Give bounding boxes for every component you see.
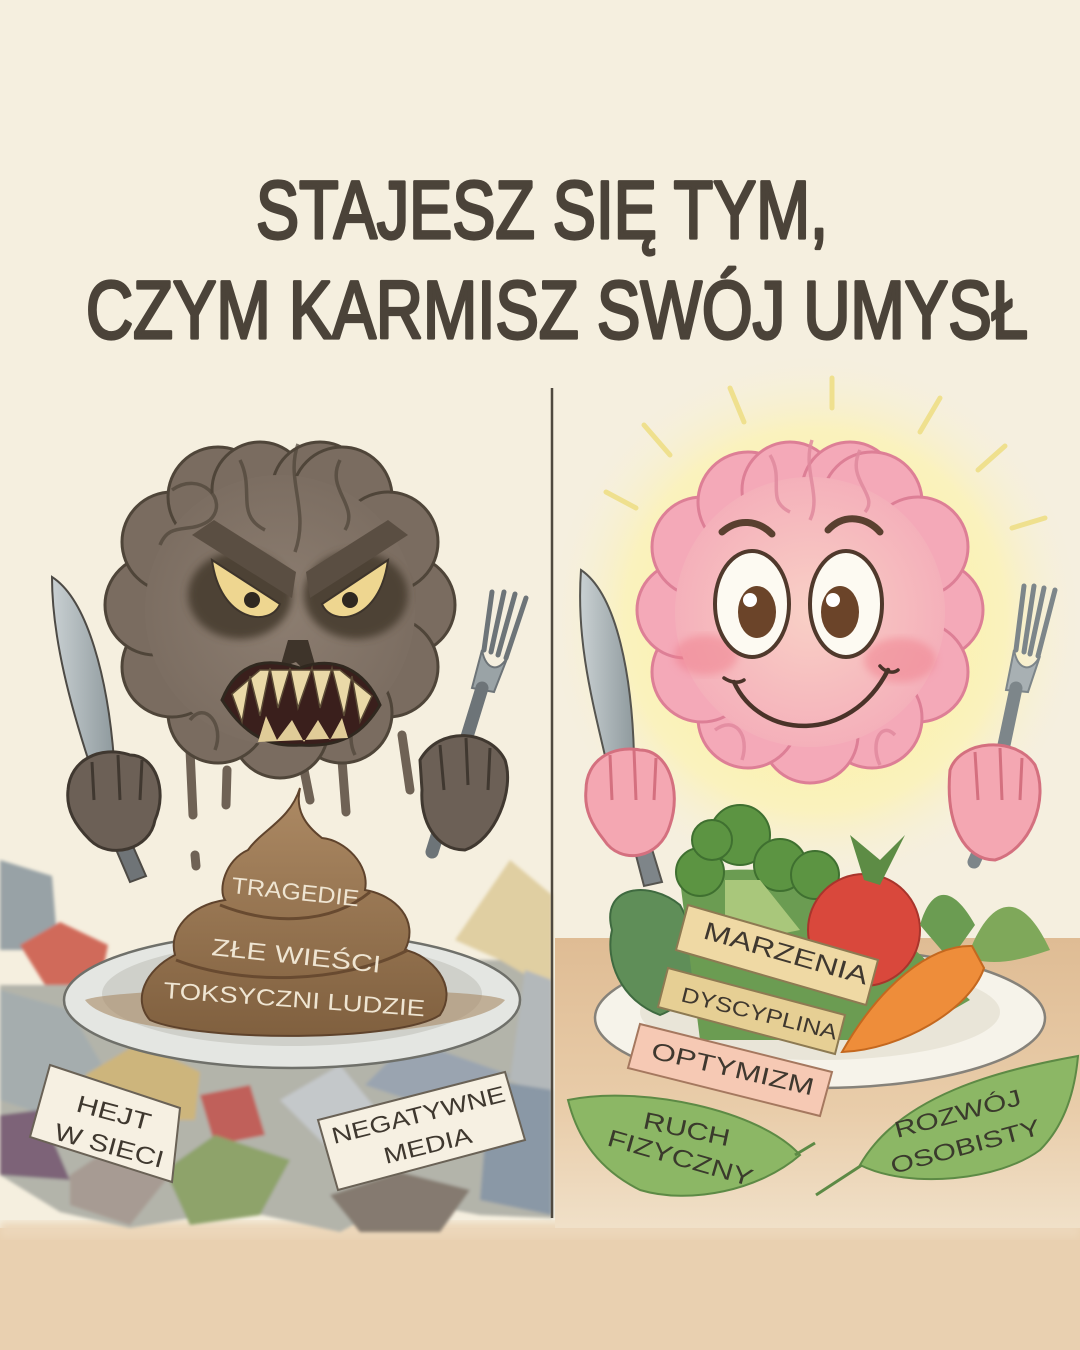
card: hejt w sieci: W SIECI [51,1119,167,1174]
poop pile with labels [142,788,447,1036]
glow [550,355,1080,885]
leaf: rozwój osobisty: OSOBISTY [888,1114,1043,1179]
leaf: ruch fizyczny [568,1096,815,1196]
divider line [551,388,553,1218]
label: toksyczni ludzie: TOKSYCZNI LUDZIE [163,977,426,1021]
fists right [586,745,1040,860]
banner: optymizm [628,1024,832,1116]
banner: marzenia: MARZENIA [700,917,872,991]
brain folds [160,444,370,755]
title [86,165,1028,356]
panel: negative side [0,442,552,1232]
vegetables [610,805,1050,1052]
broccoli [676,805,839,899]
table [555,938,1080,1228]
fists left [68,736,508,850]
card: negatywne media [318,1072,525,1190]
banner: optymizm: OPTYMIZM [649,1038,816,1101]
label: tragedie: TRAGEDIE [230,872,360,911]
card: negatywne media: MEDIA [381,1122,475,1169]
label: złe wieści: ZŁE WIEŚCI [210,933,382,979]
card: hejt w sieci: HEJT [73,1091,154,1137]
leaf: ruch fizyczny: RUCH [641,1107,732,1152]
leaf: rozwój osobisty: ROZWÓJ [892,1084,1024,1143]
banner: dyscyplina: DYSCYPLINA [679,984,840,1045]
leaf: rozwój osobisty [816,1056,1078,1195]
card: negatywne media: NEGATYWNE [329,1081,508,1149]
tomato [808,874,920,986]
leaf: ruch fizyczny: FIZYCZNY [604,1125,756,1192]
drips [190,735,410,866]
fork right [974,586,1055,862]
pink brain [637,440,983,783]
plate left [64,932,520,1068]
knife left [52,577,146,882]
fork left [432,592,526,852]
grey brain [105,442,455,778]
panel: positive side [550,355,1080,1228]
title: STAJESZ SIĘ TYM, [256,165,828,256]
evil face [188,520,408,745]
leaves right of tomato [920,895,975,960]
spinach leaves [610,890,695,1015]
banner: dyscyplina [658,968,845,1054]
plate right [595,948,1045,1088]
knife right [580,570,662,886]
garbage pile [0,860,552,1232]
happy face [715,519,898,726]
card: hejt w sieci [30,1065,180,1182]
banner: marzenia [676,905,878,1005]
sun rays [606,378,1045,528]
brain folds [715,440,895,765]
carrot [842,946,984,1052]
